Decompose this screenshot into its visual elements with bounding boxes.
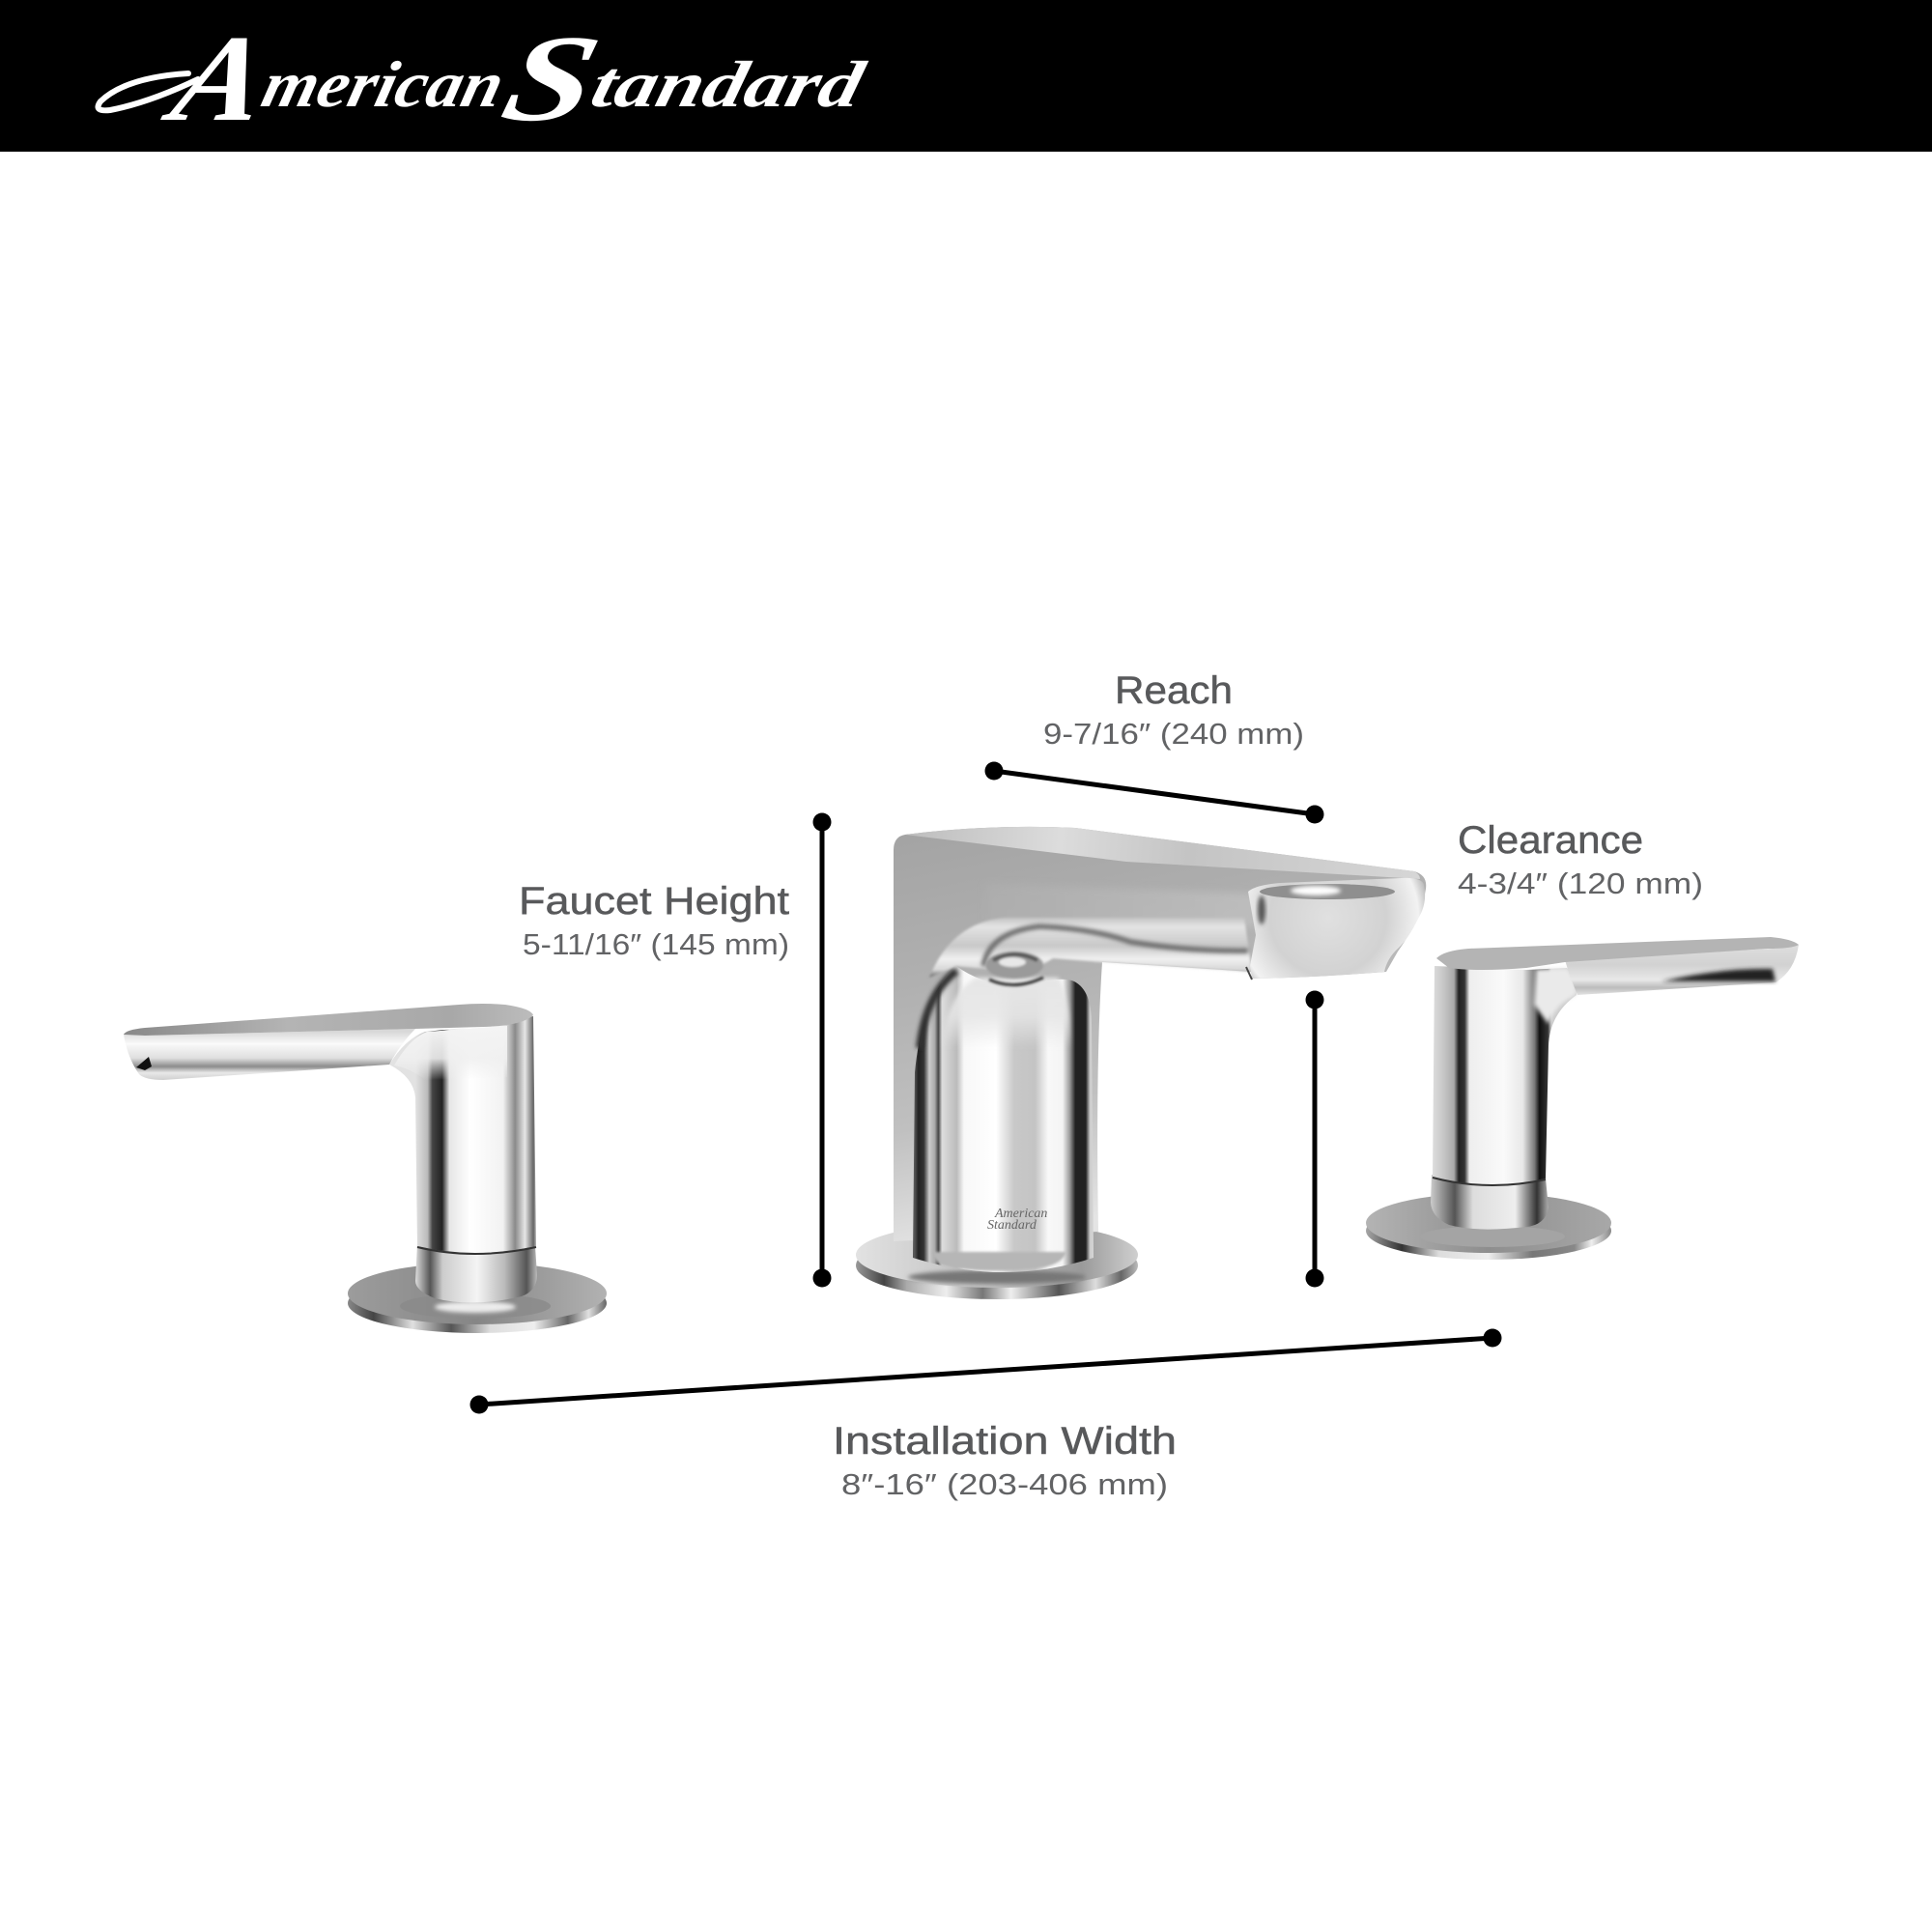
faucet connector knob <box>985 952 1043 985</box>
right handle body <box>1433 966 1577 1185</box>
left handle neck highlight <box>394 1026 507 1080</box>
left handle ring line <box>417 1247 536 1254</box>
right handle base disc <box>1366 1193 1611 1260</box>
right handle collar <box>1431 1175 1548 1230</box>
faucet small logo: American <box>994 1207 1047 1221</box>
left handle body <box>389 1016 536 1253</box>
logo word American: merican <box>255 47 512 121</box>
label: faucet height: Faucet Height <box>519 880 789 923</box>
dimension: faucet height line <box>813 813 831 1287</box>
label: reach: 9-7/16″ (240 mm) <box>1043 717 1304 751</box>
faucet column foot <box>932 1252 1066 1271</box>
faucet column <box>913 966 1094 1272</box>
label: installation width <box>833 1420 1177 1501</box>
label: installation width: 8″-16″ (203-406 mm) <box>841 1467 1168 1501</box>
logo: American Standard <box>99 11 882 148</box>
label: faucet height: 5-11/16″ (145 mm) <box>523 927 789 961</box>
label: installation width: Installation Width <box>833 1420 1177 1463</box>
center faucet <box>856 827 1426 1299</box>
faucet base disc <box>856 1222 1138 1299</box>
right handle top face <box>1436 937 1799 970</box>
right handle ring line <box>1433 1178 1546 1185</box>
logo word Standard: S <box>491 11 612 148</box>
label: reach <box>1043 669 1304 751</box>
left handle <box>124 1004 607 1333</box>
dimension: reach line <box>985 761 1323 823</box>
right handle lever shadow <box>1662 969 1776 981</box>
left handle lever tip shadow <box>136 1057 152 1070</box>
faucet dark ribbon <box>983 926 1248 966</box>
faucet small logo: Standard <box>987 1218 1037 1233</box>
faucet column top highlight <box>942 978 1070 1048</box>
faucet shoulder shadow <box>920 971 956 1048</box>
logo word Standard: tandard <box>584 47 873 121</box>
label: faucet height <box>519 880 789 961</box>
logo word American: A <box>154 11 283 148</box>
header bar <box>0 0 1932 152</box>
left handle top face <box>124 1004 533 1036</box>
label: clearance: Clearance <box>1458 819 1643 862</box>
right handle neck highlight <box>1534 968 1577 1024</box>
right handle lever <box>1565 945 1799 995</box>
faucet spout top face <box>905 827 1420 879</box>
left handle base disc <box>348 1263 607 1333</box>
faucet spout tip <box>1246 878 1425 980</box>
label: reach: Reach <box>1115 669 1233 712</box>
dimension: clearance line <box>1306 991 1323 1287</box>
logo swash <box>99 73 198 110</box>
label: clearance: 4-3/4″ (120 mm) <box>1458 867 1703 900</box>
label: clearance <box>1458 819 1703 900</box>
faucet back plate <box>894 827 1426 1241</box>
left handle lever <box>124 1029 415 1080</box>
faucet spout band <box>929 918 1252 978</box>
dimension: installation width line <box>469 1329 1501 1414</box>
right handle <box>1366 937 1799 1260</box>
left handle collar <box>415 1244 537 1303</box>
faucet spout side <box>985 884 1256 927</box>
